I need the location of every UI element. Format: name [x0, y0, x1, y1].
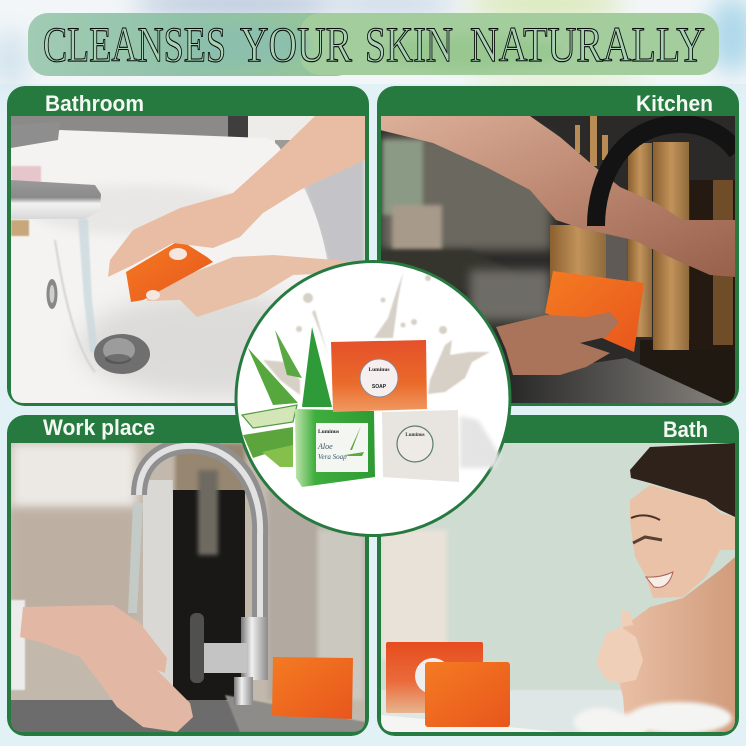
front soap	[425, 662, 510, 727]
hand	[596, 610, 643, 683]
kitchen heading: Kitchen	[636, 91, 713, 116]
panel frame	[377, 415, 739, 736]
panel frame	[377, 86, 739, 406]
water	[128, 503, 143, 613]
wooden utensil holders	[550, 142, 733, 350]
foam	[574, 702, 732, 737]
title	[43, 16, 705, 72]
aloe slices	[242, 405, 297, 467]
title: CLEANSES	[43, 16, 226, 72]
panel frame	[7, 86, 369, 406]
banner shape	[28, 13, 356, 76]
green soap	[295, 409, 375, 487]
faucet base	[11, 130, 60, 148]
white soap	[382, 410, 459, 482]
nails	[146, 248, 187, 300]
orange soap: Luminus	[368, 367, 390, 373]
orange soap: SOAP	[372, 384, 387, 390]
white soap: Luminus	[405, 433, 425, 438]
lower hand	[496, 312, 619, 375]
woman	[574, 443, 735, 737]
panel: kitchen	[377, 86, 739, 406]
soap bar	[545, 271, 644, 352]
steel sink	[530, 358, 724, 403]
powder pile	[460, 416, 500, 468]
panel: work place	[7, 415, 369, 736]
title: YOUR	[240, 16, 353, 72]
water stream	[78, 219, 98, 352]
upper arm	[380, 116, 735, 277]
panel: bath	[377, 415, 739, 737]
work place heading: Work place	[43, 415, 155, 440]
top hand and arm	[108, 116, 365, 277]
bath scene	[381, 443, 735, 737]
bottom hand	[145, 255, 360, 317]
hair	[630, 443, 735, 517]
icon: chrome faucet	[139, 446, 268, 705]
milk splash	[263, 273, 490, 395]
hands	[20, 605, 193, 732]
green soap: Aloe	[317, 442, 333, 451]
pink item	[11, 166, 41, 182]
bathroom heading: Bathroom	[45, 91, 144, 116]
aloe leaves	[248, 327, 332, 407]
smile	[646, 572, 673, 587]
center circle	[236, 262, 510, 536]
icon: drain	[94, 334, 150, 374]
green soap: Luminus	[318, 429, 339, 435]
panel frame	[7, 415, 369, 736]
icon: black faucet	[596, 124, 737, 226]
bathroom scene	[11, 116, 365, 404]
bath heading: Bath	[663, 417, 708, 442]
icon: faucet	[11, 180, 101, 219]
face	[630, 485, 735, 598]
eye and brow	[631, 515, 662, 543]
kitchen scene	[380, 116, 737, 404]
panel: bathroom	[7, 86, 369, 406]
work place scene	[11, 443, 365, 732]
wooden sticks	[575, 116, 608, 166]
orange soap	[331, 340, 427, 412]
soap bar	[272, 657, 353, 719]
sleeve	[11, 600, 25, 690]
body	[618, 557, 735, 733]
soap bar	[126, 240, 213, 302]
icon: overflow	[46, 279, 58, 309]
green soap: Vera Soap	[318, 453, 347, 461]
title: SKIN	[365, 16, 453, 72]
back soap	[386, 642, 483, 713]
title banner	[28, 13, 719, 76]
